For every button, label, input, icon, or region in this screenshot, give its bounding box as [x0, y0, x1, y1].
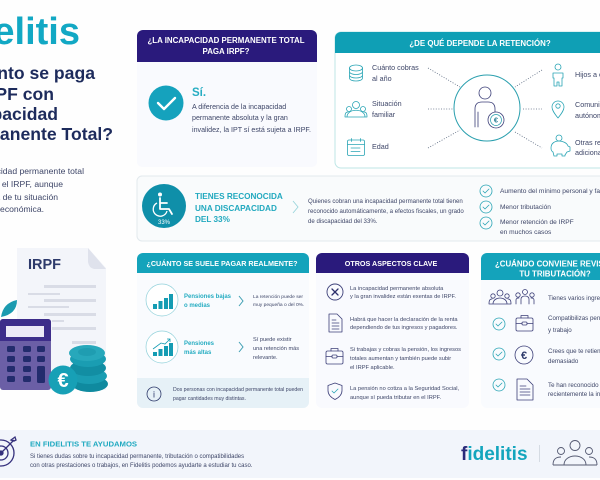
aspect: declaración — [329, 314, 458, 332]
label: pensiones más altas: Pensiones — [184, 341, 215, 347]
row: varios ingresos — [489, 290, 600, 304]
aspect: exentas — [327, 284, 456, 300]
header — [137, 253, 309, 273]
row: retienen demasiado: demasiado — [548, 358, 579, 365]
factor: cuánto cobras: Cuánto cobras — [372, 63, 419, 72]
title — [0, 63, 113, 144]
footer text: Si tienes dudas sobre tu incapacidad permanente, tributación o compatibilidades — [30, 454, 244, 460]
aspect: exentas: La incapacidad permanente absoluta — [350, 286, 444, 292]
icon: high bars — [146, 331, 178, 363]
arrow — [239, 296, 243, 306]
factor: situación familiar: familiar — [372, 110, 396, 119]
panel: la incapacidad paga IRPF — [137, 30, 317, 167]
row: retienen demasiado: € — [521, 350, 527, 362]
text: retención relevante: relevante. — [253, 355, 278, 361]
factor: edad — [348, 138, 389, 156]
heading — [195, 192, 283, 224]
row: reconocido — [493, 379, 600, 400]
answer: invalidez, la IPT sí está sujeta a IRPF. — [192, 126, 311, 134]
label: pensiones bajas — [184, 294, 232, 309]
info strip: i — [153, 390, 155, 400]
icon: people — [553, 440, 597, 465]
header: TU TRIBUTACIÓN? — [519, 270, 591, 278]
factor: cuánto cobras: al año — [372, 74, 392, 83]
aspect: trabajo y pensión: el IRPF aplicable. — [350, 365, 395, 371]
document: IRPF — [28, 257, 61, 273]
info strip — [137, 378, 309, 408]
row: compatibilizas: y trabajo — [548, 327, 572, 334]
aspect: trabajo y pensión: totales aumentan y también puede subir — [350, 356, 451, 362]
aspect: seguridad social: aunque sí pueda tributar en el IRPF. — [350, 395, 441, 401]
euro coin: € — [57, 370, 69, 392]
aspect: seguridad social — [328, 383, 460, 401]
euro coin — [48, 366, 78, 394]
intro text — [0, 166, 84, 214]
header: PAGA IRPF? — [203, 47, 250, 56]
aspect: trabajo y pensión: Si trabajas y cobras la pensión, los ingresos — [350, 347, 461, 353]
text: retención pequeña: muy pequeña o del 0%. — [253, 302, 304, 308]
benefits list: Menor tributación — [500, 204, 551, 211]
header — [335, 32, 600, 53]
heading: TIENES RECONOCIDA — [195, 192, 283, 201]
benefits list: Menor retención de IRPF — [500, 219, 574, 226]
row: retienen demasiado — [493, 346, 600, 365]
icon: wheelchair 33% — [142, 184, 186, 228]
aspect: exentas: y la gran invalidez están exentas de IRPF. — [350, 294, 456, 300]
icon: target — [0, 437, 16, 466]
logo: footer: fidelitis — [461, 444, 528, 465]
info strip: Dos personas con incapacidad permanente total pueden — [173, 387, 303, 393]
description: Quienes cobran una incapacidad permanente total tienen — [308, 198, 463, 205]
illustration: IRPF document, calculator and coins — [0, 248, 108, 394]
panel: cuándo conviene revisar — [481, 253, 600, 408]
info strip: pagar cantidades muy distintas. — [173, 396, 246, 402]
answer: permanente absoluta y la gran — [192, 114, 288, 122]
answer: Sí. — [192, 87, 206, 99]
factor: comunidad autónoma — [552, 100, 600, 120]
label: pensiones bajas: o medias — [184, 303, 211, 309]
factor: edad: Edad — [372, 142, 389, 151]
text: retención relevante: Sí puede existir — [253, 337, 292, 343]
label: pensiones bajas: Pensiones bajas — [184, 294, 232, 300]
panel: otros aspectos clave — [316, 253, 469, 408]
label: pensiones más altas — [184, 341, 215, 356]
footer band — [0, 430, 600, 478]
factor: situación familiar — [345, 99, 402, 119]
description — [308, 198, 464, 225]
text: retención pequeña: La retención puede ser — [253, 294, 303, 300]
answer: A diferencia de la incapacidad — [192, 103, 286, 111]
footer text: con otras prestaciones o trabajos, en Fidelitis podemos ayudarte a estudiar tu caso. — [30, 463, 253, 469]
header: ¿LA INCAPACIDAD PERMANENTE TOTAL — [147, 36, 305, 45]
row: reconocido: Te han reconocido — [548, 382, 599, 389]
benefits list: en muchos casos — [500, 229, 552, 236]
text: retención relevante: una retención más — [253, 346, 299, 352]
header — [481, 253, 600, 280]
row: compatibilizas — [493, 315, 600, 334]
footer text — [30, 454, 253, 469]
header: ¿CUÁNTO SE SUELE PAGAR REALMENTE? — [146, 259, 298, 268]
description: de discapacidad del 33%. — [308, 218, 378, 225]
header: OTROS ASPECTOS CLAVE — [345, 259, 437, 268]
calculator — [0, 319, 51, 390]
label: pensiones más altas: más altas — [184, 350, 212, 356]
benefits list — [480, 185, 600, 236]
icon: wheelchair 33%: 33% — [158, 220, 171, 226]
aspect: seguridad social: La pensión no cotiza a la Seguridad Social, — [350, 386, 460, 392]
heading: DEL 33% — [195, 215, 231, 224]
panel: de qué depende la retención — [335, 32, 600, 168]
icon: low bars — [146, 284, 178, 316]
footer heading: EN FIDELITIS TE AYUDAMOS — [30, 440, 137, 448]
aspect: declaración: Habrá que hacer la declaración de la renta — [350, 317, 458, 323]
panel: cuánto se suele pagar — [137, 253, 309, 408]
central circle: person with euro — [454, 75, 520, 141]
divider — [539, 445, 540, 462]
text: retención pequeña — [253, 294, 304, 308]
leaf — [1, 300, 17, 317]
description: reconocido automáticamente, a efectos fiscales, un grado — [308, 208, 464, 215]
factor: cuánto cobras — [350, 63, 419, 83]
heading: UNA DISCAPACIDAD — [195, 204, 277, 213]
aspect: trabajo y pensión — [326, 347, 461, 371]
document — [17, 248, 106, 390]
text: retención relevante — [253, 337, 299, 361]
arrow — [293, 201, 298, 213]
arrow — [239, 342, 243, 352]
central circle: person with euro: € — [494, 116, 499, 124]
panel: discapacidad 33% — [137, 176, 600, 241]
answer — [192, 87, 311, 134]
factor: situación familiar: Situación — [372, 99, 402, 108]
coin stack — [69, 345, 108, 392]
aspect: declaración: dependiendo de tus ingresos y pagadores. — [350, 325, 458, 331]
icon: check circle — [148, 86, 184, 120]
factor: hijos a cargo — [553, 64, 600, 86]
header — [137, 30, 317, 62]
header: ¿DE QUÉ DEPENDE LA RETENCIÓN? — [409, 39, 551, 48]
dotted connectors — [428, 68, 542, 148]
header — [316, 253, 469, 273]
factor: otras rentas — [551, 135, 600, 157]
